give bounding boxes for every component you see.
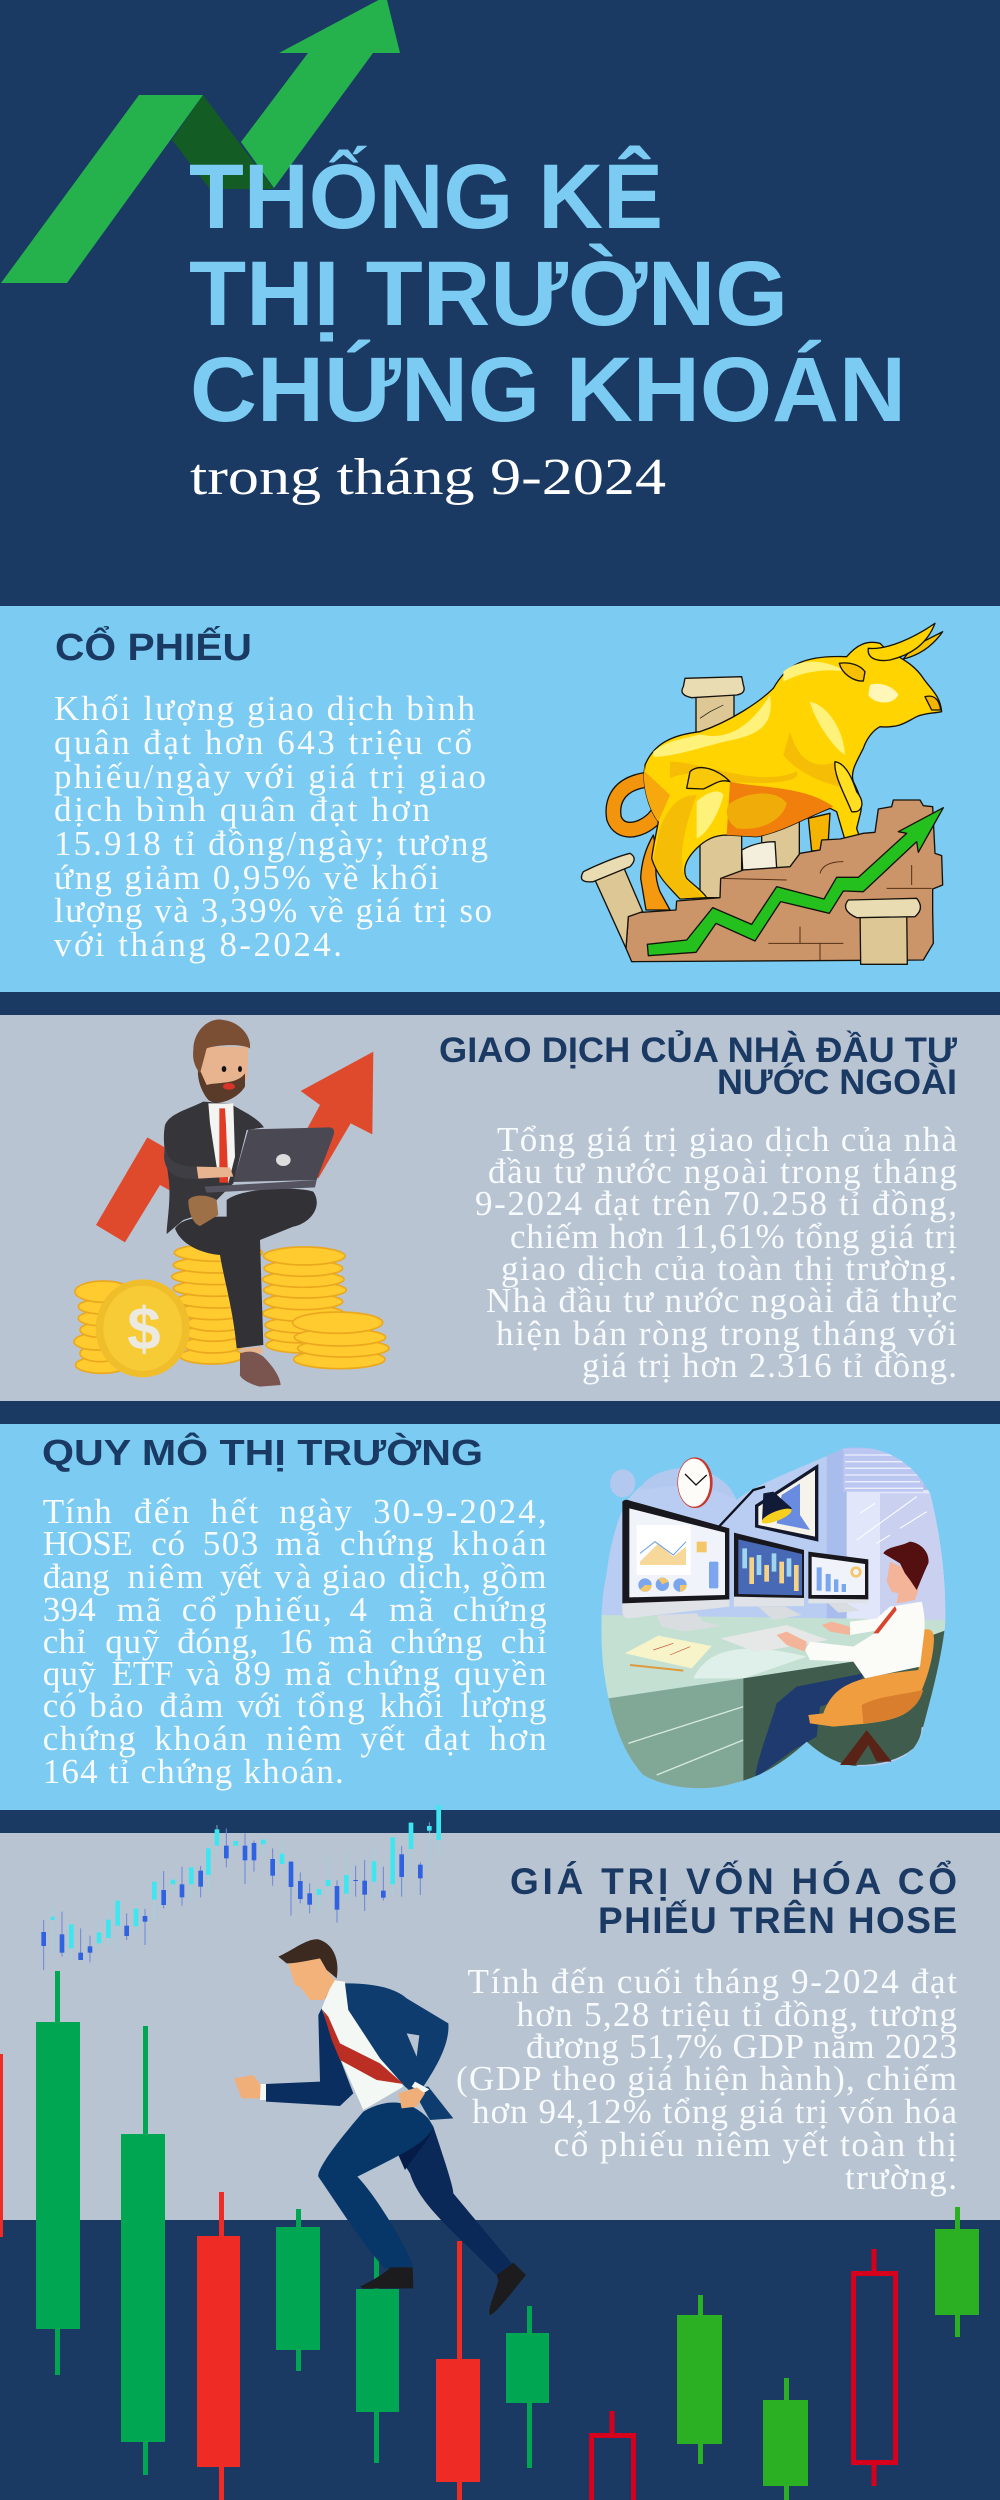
wall arc xyxy=(640,1468,735,1499)
body text: 394 xyxy=(43,1590,96,1629)
body text: quyền xyxy=(454,1654,546,1693)
pants xyxy=(755,1673,863,1778)
panel: giao dịch của nhà đầu tư nước ngoài xyxy=(0,1015,1000,1401)
body text: mã xyxy=(285,1654,332,1693)
tail xyxy=(613,780,707,830)
body text: 15.918 tỉ đồng/ngày; tương xyxy=(54,824,488,863)
body text: Khối lượng giao dịch bình xyxy=(54,689,476,728)
chart: large green and red candlesticks xyxy=(0,1971,979,2500)
body text: đạt xyxy=(424,1719,470,1758)
front leg xyxy=(835,762,862,812)
body text: có xyxy=(151,1524,185,1563)
body text: quân đạt hơn 643 triệu cổ xyxy=(54,723,472,762)
body text: giá trị hơn 2.316 tỉ đồng. xyxy=(582,1346,957,1385)
body text: niêm xyxy=(266,1719,342,1758)
back pillar xyxy=(682,677,744,733)
big dollar coin xyxy=(96,1279,190,1377)
monitor stands xyxy=(657,1613,722,1632)
body text: dịch bình quân đạt hơn xyxy=(54,790,430,829)
investor figure xyxy=(164,1019,334,1387)
monitor three xyxy=(808,1552,868,1603)
heading: GIAO DỊCH CỦA NHÀ ĐẦU TƯ xyxy=(439,1030,958,1070)
body text: với tháng 8-2024. xyxy=(54,925,342,964)
body text: giao xyxy=(322,1557,386,1596)
body text: chứng xyxy=(346,1654,440,1693)
title: THỐNG KÊ xyxy=(189,144,663,248)
body text: mã xyxy=(328,1622,374,1661)
trader figure xyxy=(777,1542,929,1678)
desk xyxy=(597,1615,947,1698)
body text: tổng xyxy=(297,1686,365,1725)
body text: khoán xyxy=(452,1524,547,1563)
body text xyxy=(54,689,492,964)
title: CHỨNG KHOÁN xyxy=(190,338,906,441)
panel: cổ phiếu xyxy=(0,606,1000,992)
body text: yết xyxy=(360,1719,405,1758)
body text: hơn 5,28 triệu tỉ đồng, tương xyxy=(516,1995,957,2034)
body text: đến xyxy=(134,1492,189,1531)
body text: gồm xyxy=(482,1557,546,1596)
body text: hết xyxy=(210,1492,259,1531)
blue candles xyxy=(41,1828,423,1970)
body text: chứng xyxy=(43,1719,136,1758)
fallen column xyxy=(595,867,643,948)
body text: HOSE xyxy=(43,1524,133,1563)
bricks xyxy=(626,800,943,962)
panel background xyxy=(0,1833,1000,2220)
body text: lượng và 3,39% về giá trị so xyxy=(54,891,492,930)
monitor one xyxy=(622,1500,729,1618)
heading: NƯỚC NGOÀI xyxy=(717,1062,957,1102)
body text: chỉ xyxy=(501,1622,547,1661)
body text: bảo xyxy=(89,1686,144,1725)
panel: giá trị vốn hóa cổ phiếu trên hose xyxy=(0,1805,1000,2500)
cyan candles xyxy=(51,1805,441,1961)
chair xyxy=(808,1629,934,1765)
body text: mã xyxy=(389,1590,434,1629)
middle and right pillars xyxy=(700,820,799,898)
body text: Tính đến cuối tháng 9-2024 đạt xyxy=(468,1962,957,2001)
clock xyxy=(677,1457,713,1508)
heading xyxy=(439,1030,958,1102)
wall blobs xyxy=(610,1469,635,1497)
heading: PHIẾU TRÊN HOSE xyxy=(598,1899,957,1941)
title: THỊ TRƯỜNG xyxy=(189,242,788,345)
ear and snout xyxy=(839,663,865,681)
body text: và xyxy=(186,1654,220,1693)
body text: phiếu, xyxy=(235,1590,332,1629)
body text: 30-9-2024, xyxy=(373,1492,547,1531)
body text: và xyxy=(274,1557,312,1596)
panel: quy mô thị trường xyxy=(0,1424,1000,1810)
body text: đương 51,7% GDP năm 2023 xyxy=(526,2027,957,2066)
body text: đảm xyxy=(160,1686,223,1725)
body text: quỹ xyxy=(105,1622,160,1661)
body text: Tính xyxy=(43,1492,112,1531)
heading: GIÁ TRỊ VỐN HÓA CỔ xyxy=(510,1859,957,1902)
body text: hơn 94,12% tổng giá trị vốn hóa xyxy=(472,2092,957,2131)
stationery xyxy=(625,1625,828,1671)
panel background xyxy=(0,1015,1000,1401)
body text: dịch, xyxy=(399,1557,471,1596)
illustration: golden bull on bricks xyxy=(581,623,943,964)
body text: cổ phiếu niêm yết toàn thị xyxy=(554,2125,957,2164)
body text: trường. xyxy=(845,2158,957,2197)
big dollar coin: $ xyxy=(127,1295,161,1362)
body text: hiện bán ròng trong tháng với xyxy=(496,1314,957,1353)
body text xyxy=(43,1492,547,1791)
body text: hơn xyxy=(489,1719,547,1758)
desk lamp xyxy=(718,1487,793,1527)
body text: chứng xyxy=(390,1622,483,1661)
horns xyxy=(903,632,943,659)
body text: mã xyxy=(276,1524,321,1563)
body text: ETF xyxy=(112,1654,174,1693)
monitor two xyxy=(734,1533,804,1607)
heading: CỔ PHIẾU xyxy=(55,624,252,669)
body text: khoán xyxy=(154,1719,247,1758)
body text: 503 xyxy=(203,1524,258,1563)
body text: Nhà đầu tư nước ngoài đã thực xyxy=(486,1281,957,1320)
illustration: investor on coins with laptop xyxy=(74,1019,389,1387)
body text: đóng, xyxy=(177,1622,258,1661)
illustration: running businessman xyxy=(234,1939,526,2315)
front pillar xyxy=(860,908,907,964)
title xyxy=(189,144,906,441)
chart: small blue and cyan candlesticks xyxy=(41,1805,441,1970)
body text: giao dịch của toàn thị trường. xyxy=(501,1249,957,1288)
red arrow xyxy=(96,1052,373,1242)
panel background xyxy=(0,1424,1000,1810)
body text: yết xyxy=(220,1557,262,1596)
panel background xyxy=(0,606,1000,992)
body text: chỉ xyxy=(43,1622,86,1661)
body text: 164 tỉ chứng khoán. xyxy=(43,1752,344,1791)
belly shading xyxy=(644,662,898,898)
body text: ứng giảm 0,95% về khối xyxy=(54,858,439,897)
coin stacks xyxy=(74,1244,389,1373)
body text: chiếm hơn 11,61% tổng giá trị xyxy=(510,1217,957,1256)
body text: đầu tư nước ngoài trong tháng xyxy=(488,1152,957,1191)
far legs xyxy=(641,813,830,910)
body text xyxy=(456,1962,957,2197)
body text: đang xyxy=(43,1557,110,1596)
body text: (GDP theo giá hiện hành), chiếm xyxy=(456,2059,957,2098)
clipped scene xyxy=(601,1447,946,1788)
body text: 4 xyxy=(350,1590,367,1629)
body text: quỹ xyxy=(43,1654,96,1693)
body text: chứng xyxy=(453,1590,547,1629)
icon: green up arrow xyxy=(1,0,400,283)
bull body xyxy=(644,642,942,899)
body text: ngày xyxy=(279,1492,352,1531)
heading xyxy=(510,1859,957,1941)
body text: 16 xyxy=(279,1622,312,1661)
body text: có xyxy=(43,1686,76,1725)
green arrow xyxy=(647,808,943,956)
heading: QUY MÔ THỊ TRƯỜNG xyxy=(42,1431,483,1473)
body text: lượng xyxy=(460,1686,546,1725)
body text: cổ xyxy=(182,1590,217,1629)
tail tuft xyxy=(687,768,730,789)
body text: 89 xyxy=(234,1654,271,1693)
body text: chứng xyxy=(340,1524,434,1563)
body text: khối xyxy=(380,1686,444,1725)
subtitle: trong tháng 9-2024 xyxy=(190,449,666,506)
body text: phiếu/ngày với giá trị giao xyxy=(54,757,486,796)
body text: mã xyxy=(117,1590,162,1629)
illustration: trader at three monitors xyxy=(601,1447,946,1788)
body text: Tổng giá trị giao dịch của nhà xyxy=(497,1120,957,1159)
header panel xyxy=(1,0,906,506)
body text: niêm xyxy=(128,1557,204,1596)
body text xyxy=(475,1120,957,1385)
body text: 9-2024 đạt trên 70.258 tỉ đồng, xyxy=(475,1184,957,1223)
body text: với xyxy=(237,1686,282,1725)
